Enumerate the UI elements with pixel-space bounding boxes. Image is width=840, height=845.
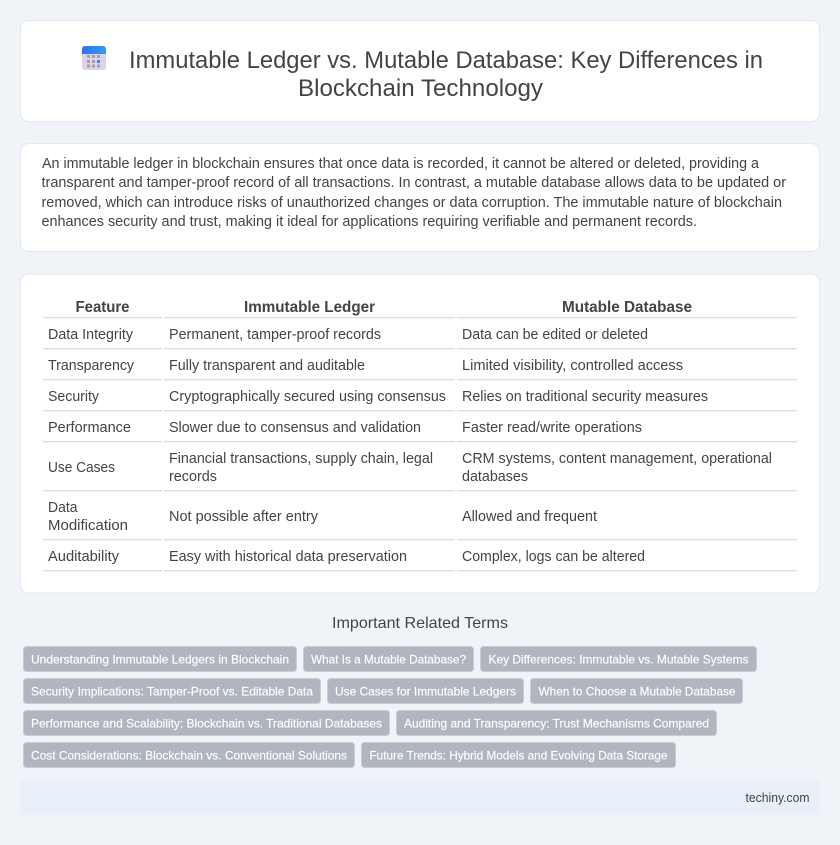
row: auditability: Auditability [48, 549, 120, 565]
row: data integrity [48, 327, 648, 343]
tag: performance and scalability [24, 710, 390, 736]
tag: security implications [24, 678, 320, 704]
row: use cases: records [169, 469, 217, 485]
table header row: Immutable Ledger [244, 299, 375, 316]
row: security: Security [48, 389, 100, 405]
text block: introduction paragraph: removed, which can introduce risks of unauthorized changes or data corruption. The immutable nature of blockchain [42, 195, 782, 211]
text block: introduction paragraph: transparent and tamper-proof record of all transactions. In contrast, a mutable database allows data to be updated or [42, 175, 786, 191]
table header row: Mutable Database [562, 299, 692, 316]
row: performance: Faster read/write operations [462, 420, 642, 436]
icon: calendar grid [82, 46, 106, 70]
text block: introduction paragraph: An immutable ledger in blockchain ensures that once data is recorded, it cannot be altered or deleted, providing a [42, 156, 760, 172]
tag: use cases: Use Cases for Immutable Ledgers [335, 684, 516, 698]
panel: header [20, 20, 820, 122]
tag: auditing and transparency: Auditing and Transparency: Trust Mechanisms Compared [404, 716, 709, 730]
title: Immutable Ledger vs. Mutable Database: Key Differences in [129, 47, 763, 74]
row: auditability: Complex, logs can be altered [462, 549, 645, 565]
tag: use cases [328, 678, 524, 704]
row: use cases: Use Cases [48, 460, 115, 476]
tag: cost considerations [24, 742, 354, 768]
tag: key differences: Key Differences: Immutable vs. Mutable Systems [488, 652, 748, 666]
tag: security implications: Security Implications: Tamper-Proof vs. Editable Data [31, 684, 313, 698]
panel: introduction [20, 144, 820, 252]
row: data modification: Modification [48, 518, 128, 534]
tag: when to choose [530, 678, 742, 704]
tag: key differences [480, 646, 756, 672]
tag: performance and scalability: Performance and Scalability: Blockchain vs. Traditional Databases [31, 716, 382, 730]
tag: understanding immutable ledgers: Understanding Immutable Ledgers in Blockchain [31, 652, 289, 666]
row: auditability [48, 549, 645, 565]
row: data integrity: Permanent, tamper-proof records [169, 327, 381, 343]
table header row: Feature [76, 299, 130, 316]
row: transparency [48, 358, 683, 374]
tag: cost considerations: Cost Considerations: Blockchain vs. Conventional Solutions [31, 748, 347, 762]
row: use cases: databases [462, 469, 528, 485]
heading: important related terms: Important Related Terms [332, 615, 508, 632]
tag: auditing and transparency [396, 710, 716, 736]
title: Blockchain Technology [298, 75, 543, 102]
row: performance: Slower due to consensus and validation [169, 420, 421, 436]
text block: introduction paragraph: enhances security and trust, making it ideal for applications requiring verifiable and permanent records. [42, 214, 697, 230]
row: performance [48, 420, 642, 436]
row: use cases: CRM systems, content management, operational [462, 451, 772, 467]
row: security: Cryptographically secured using consensus [169, 389, 446, 405]
row: use cases: Financial transactions, supply chain, legal [169, 451, 433, 467]
row: security: Relies on traditional security measures [462, 389, 708, 405]
row: security [48, 389, 708, 405]
row: transparency: Limited visibility, controlled access [462, 358, 683, 374]
tag: what is a mutable database [304, 646, 474, 672]
row: transparency: Transparency [48, 358, 135, 374]
row: data modification: Not possible after entry [169, 509, 319, 525]
tag: what is a mutable database: What Is a Mutable Database? [311, 652, 466, 666]
row: performance: Performance [48, 420, 131, 436]
row: transparency: Fully transparent and auditable [169, 358, 365, 374]
row: data modification: Data [48, 500, 78, 516]
row: data integrity: Data can be edited or deleted [462, 327, 648, 343]
footer [20, 781, 820, 815]
row: data integrity: Data Integrity [48, 327, 134, 343]
row: use cases [48, 451, 772, 485]
table header row [76, 299, 692, 316]
panel: comparison table [20, 274, 820, 593]
footer source label: techiny.com [746, 791, 810, 805]
tag: when to choose: When to Choose a Mutable Database [538, 684, 736, 698]
panel: related term tags [24, 646, 756, 768]
row: data modification: Allowed and frequent [462, 509, 597, 525]
tag: understanding immutable ledgers [24, 646, 296, 672]
tag: future trends [362, 742, 676, 768]
text block: introduction paragraph [42, 156, 786, 230]
tag: future trends: Future Trends: Hybrid Models and Evolving Data Storage [370, 748, 668, 762]
title [129, 47, 763, 102]
row: data modification [48, 500, 597, 534]
row: auditability: Easy with historical data preservation [169, 549, 407, 565]
